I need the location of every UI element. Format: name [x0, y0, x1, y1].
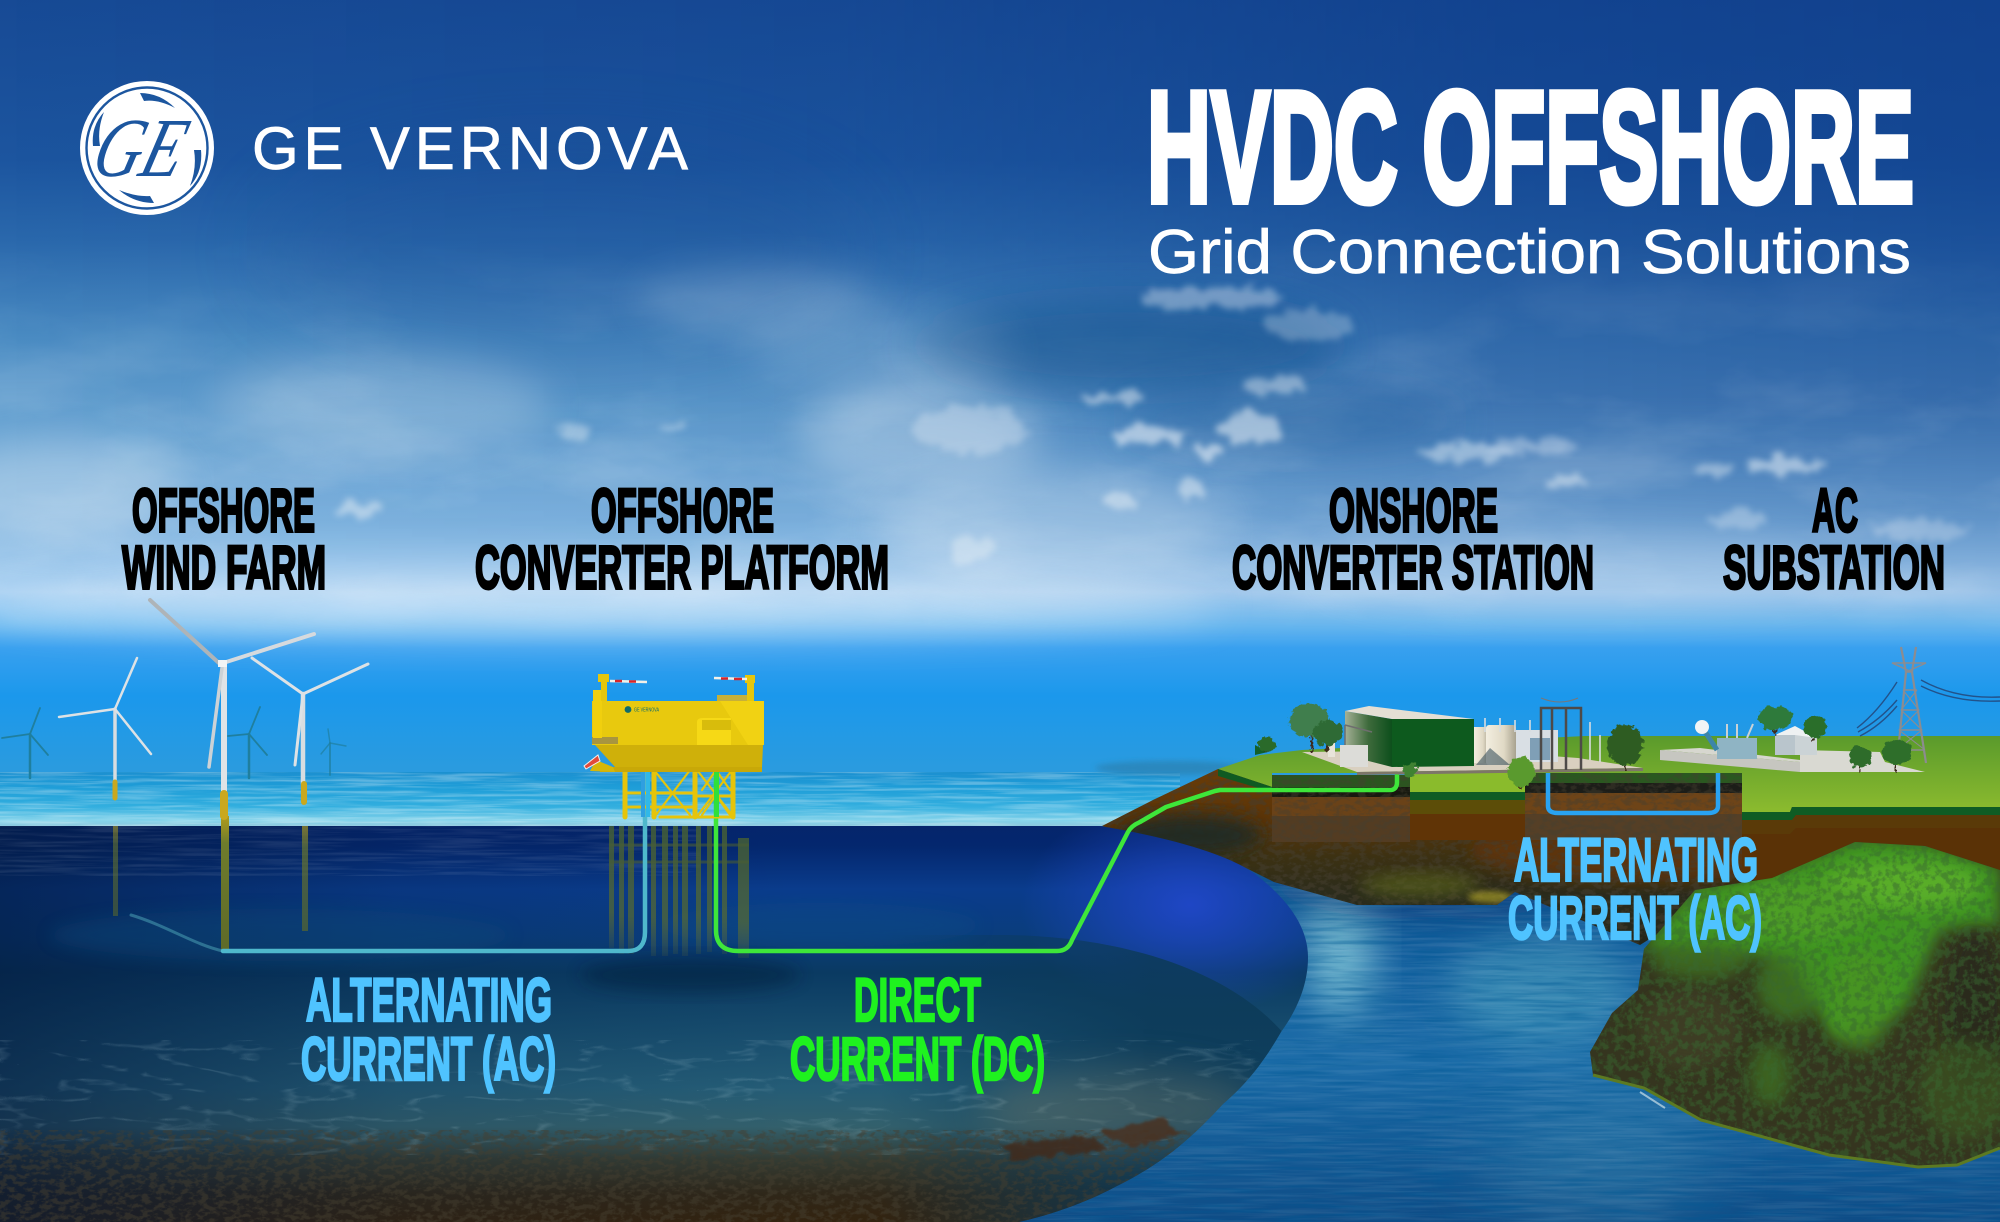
offshore land: grass and cut-away trenches [1218, 736, 2000, 880]
sea surface [0, 761, 1245, 826]
label: offshore wind farm: WIND FARM [122, 534, 326, 602]
crane right [714, 675, 755, 701]
platform tower and lift block [593, 690, 731, 745]
turbine mid right [252, 658, 368, 802]
label: alternating current onshore: CURRENT (AC) [1508, 884, 1762, 952]
turbine large [150, 600, 314, 816]
tree group: converter side [1258, 703, 1643, 790]
platform upper deck [590, 701, 764, 772]
tree group: substation side [1758, 706, 1912, 774]
control house [1775, 726, 1817, 755]
turbine monopiles underwater [113, 816, 308, 951]
logo emblem: GE [84, 102, 198, 195]
label: direct current: CURRENT (DC) [790, 1025, 1045, 1093]
left equipment [1328, 725, 1372, 767]
label: direct current: DIRECT [854, 966, 981, 1034]
grass surface [1218, 736, 2000, 812]
underwater ripple [0, 826, 700, 876]
platform helideck tag [584, 755, 600, 769]
platform hull [595, 745, 763, 767]
onshore converter station [1302, 698, 1643, 775]
label: direct current [790, 966, 1045, 1093]
subtitle: Grid Connection Solutions [1148, 218, 1911, 287]
cable: alternating current onshore [1548, 773, 1718, 813]
cliff and soil [1102, 769, 1796, 945]
cable: direct current [716, 770, 1397, 951]
pylon [1892, 647, 1926, 763]
logo wordmark: GE VERNOVA [252, 115, 688, 182]
platform cable risers [641, 771, 719, 817]
label: offshore converter platform: OFFSHORE [591, 476, 774, 544]
trench one [1272, 775, 1410, 842]
concrete pad [1302, 750, 1643, 772]
tanks [1474, 725, 1516, 765]
label: alternating current onshore: ALTERNATING [1514, 826, 1758, 894]
island [1590, 838, 2000, 1170]
label: offshore converter platform [475, 476, 889, 602]
platform legs [625, 738, 733, 817]
bay water [0, 826, 2000, 1222]
logo emblem [80, 81, 214, 215]
substation rear pad [1800, 750, 1925, 772]
rim under grass [1218, 745, 2000, 880]
small far turbines [2, 707, 346, 778]
label: alternating current offshore: ALTERNATING [306, 966, 552, 1034]
seabed mounds [62, 916, 334, 956]
clouds [0, 0, 2000, 640]
transformer [1695, 720, 1757, 759]
trees [1258, 703, 1912, 790]
seabed [0, 935, 1290, 1222]
cable: alternating current offshore [131, 770, 645, 951]
offshore platform foundation piles [609, 826, 749, 958]
label: alternating current offshore: CURRENT (AC) [301, 1025, 556, 1093]
platform logo: GE VERNOVA [634, 708, 660, 714]
platform logo [625, 706, 660, 714]
sky background [0, 0, 2000, 800]
label: alternating current onshore [1508, 826, 1762, 952]
underwater cross-section [0, 826, 1308, 1222]
label: offshore wind farm: OFFSHORE [132, 476, 315, 544]
label: onshore converter station [1232, 476, 1594, 602]
label: AC substation: AC [1812, 476, 1858, 544]
AC substation [1660, 647, 2000, 772]
label: offshore converter platform: CONVERTER PLATFORM [475, 534, 889, 602]
title [1147, 60, 1914, 287]
turbine mid left [59, 658, 151, 798]
offshore wind farm turbines [2, 600, 368, 816]
label: offshore wind farm [122, 476, 326, 602]
label: onshore converter station: CONVERTER STATION [1232, 534, 1594, 602]
switchyard and gantry [1485, 698, 1600, 770]
label: onshore converter station: ONSHORE [1329, 476, 1498, 544]
power lines [1857, 680, 2000, 736]
substation raised pad [1660, 748, 1800, 772]
green building [1345, 706, 1474, 767]
label: alternating current offshore [301, 966, 556, 1093]
crane left [598, 674, 647, 701]
label: AC substation [1723, 476, 1945, 602]
company logo [80, 81, 688, 215]
trench two [1525, 773, 1742, 840]
offshore converter platform [584, 674, 764, 817]
